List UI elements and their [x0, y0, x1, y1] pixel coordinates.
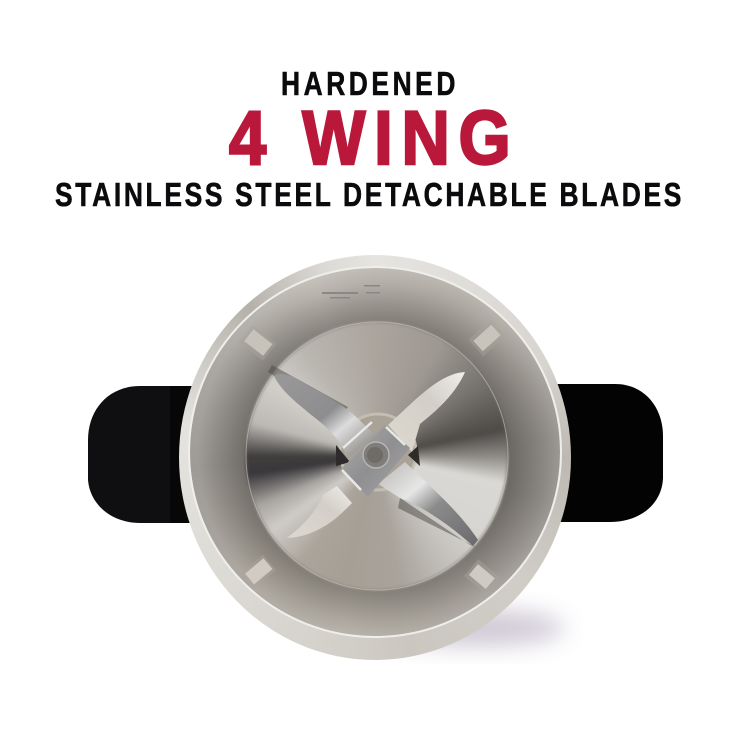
heading	[55, 66, 681, 214]
mounting tab top left	[239, 325, 277, 361]
hub plate	[342, 425, 410, 497]
heading line: hardened: HARDENED	[281, 66, 455, 103]
blade lower left	[287, 486, 352, 538]
rim highlight	[189, 267, 561, 637]
blade shadows	[268, 365, 478, 548]
hub bolt	[363, 442, 389, 468]
bowl floor	[246, 322, 508, 590]
hub base	[340, 414, 416, 490]
blade lower right	[378, 462, 478, 546]
mounting tab bottom left	[240, 555, 276, 589]
shadow under bowl	[385, 610, 565, 646]
floor edge highlight	[246, 322, 508, 590]
wall depth shading	[190, 268, 560, 636]
blade upper right	[388, 372, 465, 452]
heading line: 4 wing: 4 WING	[229, 96, 511, 181]
hub highlights	[342, 422, 405, 490]
dark gaps beside hub	[336, 445, 420, 466]
mounting tab bottom right	[464, 559, 501, 595]
mounting tab top right	[468, 320, 506, 356]
blade upper left	[274, 374, 375, 458]
heading line: stainless steel: STAINLESS STEEL DETACHABLE BLADES	[55, 177, 681, 214]
bowl outer rim	[179, 255, 571, 660]
left handle	[88, 386, 192, 523]
measurement marks	[322, 285, 380, 298]
right handle	[550, 384, 663, 522]
bowl inner wall	[190, 268, 560, 636]
